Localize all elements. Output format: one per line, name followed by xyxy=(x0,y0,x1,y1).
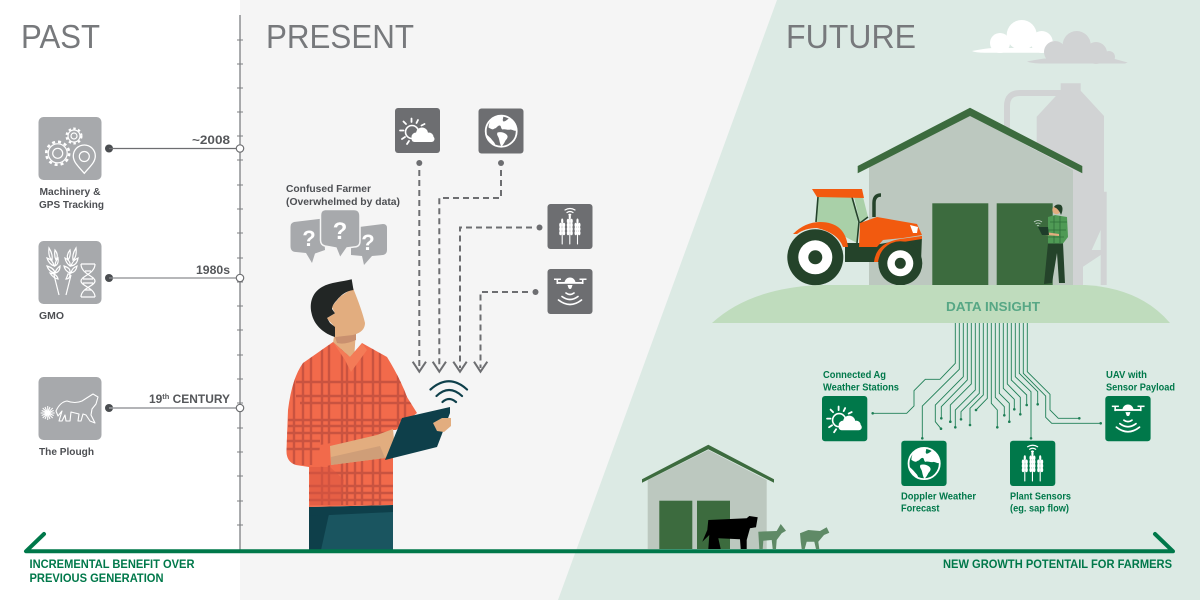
data icon: drone xyxy=(548,269,592,314)
neck and head xyxy=(333,330,356,360)
icon: wheat and DNA xyxy=(47,248,95,297)
data source: UAV xyxy=(1105,369,1175,441)
timeline item: 19th century: th xyxy=(162,392,170,401)
hill xyxy=(712,285,1170,323)
data source: UAV: Sensor Payload xyxy=(1106,381,1175,393)
icon: speech bubbles: ? xyxy=(361,230,375,255)
data icon: weather xyxy=(395,108,440,153)
circuit network xyxy=(871,323,1102,440)
icon: speech bubbles: ? xyxy=(302,226,316,251)
tablet xyxy=(385,407,450,460)
data icon: plant sensor xyxy=(548,204,592,249)
timeline item: 2008: GPS Tracking xyxy=(39,199,104,211)
hand xyxy=(433,418,451,432)
heading: data insight: DATA INSIGHT xyxy=(946,299,1040,314)
panel: present xyxy=(266,19,592,550)
title: future: FUTURE xyxy=(786,19,916,56)
plaid shirt xyxy=(286,342,417,507)
data source: plant sensors: (eg. sap flow) xyxy=(1010,502,1069,514)
wifi signal xyxy=(430,381,467,402)
timeline item: 19th century: 19 xyxy=(149,392,162,406)
caption: incremental benefit: INCREMENTAL BENEFIT OVER xyxy=(30,559,195,571)
small farmer with tablet xyxy=(1034,205,1068,284)
heading: confused farmer xyxy=(286,183,400,208)
label: The Plough xyxy=(39,446,94,458)
barn xyxy=(858,108,1082,285)
data source: doppler: Forecast xyxy=(901,502,940,514)
timeline item: 2008 xyxy=(38,117,244,211)
caption: incremental benefit: PREVIOUS GENERATION xyxy=(30,573,164,585)
icon: gears and pin xyxy=(46,128,95,173)
data source: weather stations xyxy=(822,369,899,441)
timeline axis xyxy=(237,15,243,550)
icon: speech bubbles: ? xyxy=(333,218,347,245)
cuff xyxy=(318,443,331,467)
icon: grey cloud xyxy=(1027,31,1128,64)
trousers xyxy=(309,505,393,550)
title: present: PRESENT xyxy=(266,19,414,56)
timeline item: 19th century xyxy=(38,377,244,458)
caption: incremental benefit xyxy=(30,559,195,585)
small barn xyxy=(642,445,774,549)
panel: future xyxy=(642,19,1175,549)
icon: horse and plough xyxy=(41,394,98,423)
data source: plant sensors: Plant Sensors xyxy=(1010,490,1071,502)
label: GMO xyxy=(39,310,64,322)
forearm xyxy=(330,429,395,465)
label: Machinery & xyxy=(40,186,101,198)
caption: growth potential: NEW GROWTH POTENTAIL FOR FARMERS xyxy=(943,559,1172,571)
farmer figure xyxy=(280,279,467,550)
arrow: benefit baseline xyxy=(26,534,1173,551)
timeline item: 1980s: 1980s xyxy=(196,263,230,277)
silo xyxy=(1007,83,1107,285)
timeline item: 1980s xyxy=(38,241,244,322)
icon: cow xyxy=(702,516,758,549)
title: past: PAST xyxy=(21,19,100,56)
tractor xyxy=(787,189,922,285)
data icon: globe xyxy=(478,108,524,154)
panel: past xyxy=(21,15,244,550)
data source: weather stations: Connected Ag xyxy=(823,369,886,381)
data source: weather stations: Weather Stations xyxy=(823,381,899,393)
data source: plant sensors xyxy=(1010,441,1071,514)
data source: doppler: Doppler Weather xyxy=(901,490,976,502)
icon: white cloud xyxy=(972,20,1062,55)
icon: goat xyxy=(758,524,786,549)
heading: confused farmer: Confused Farmer xyxy=(286,183,371,195)
icon: sheep xyxy=(800,527,829,549)
timeline item: 2008: ~2008 xyxy=(192,133,230,147)
arrows: data flow to tablet xyxy=(413,160,542,372)
data source: doppler xyxy=(901,441,976,514)
background: future band xyxy=(558,0,1200,600)
heading: confused farmer: (Overwhelmed by data) xyxy=(286,196,400,208)
data source: UAV: UAV with xyxy=(1106,369,1147,381)
background: present band xyxy=(240,0,1200,600)
timeline item: 19th century: CENTURY xyxy=(169,392,230,406)
icon: speech bubbles xyxy=(290,210,387,265)
